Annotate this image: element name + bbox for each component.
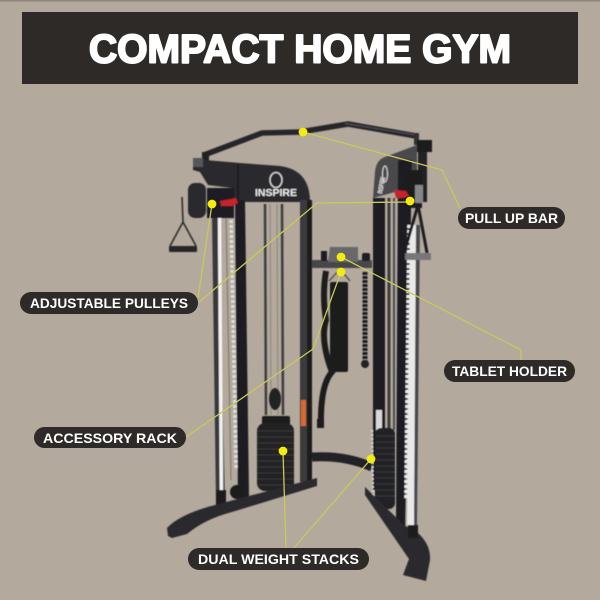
left cables bbox=[265, 204, 283, 415]
left front post and chain bbox=[235, 200, 249, 501]
right weight stack bbox=[375, 428, 395, 509]
title banner: COMPACT HOME GYM bbox=[89, 28, 511, 72]
leader lines bbox=[186, 132, 521, 549]
right frame bbox=[372, 140, 432, 532]
brand logo right: INSPIRE bbox=[377, 176, 388, 194]
label: adjustable pulleys: ADJUSTABLE PULLEYS bbox=[30, 295, 188, 311]
title banner bbox=[22, 12, 578, 84]
label: tablet holder: TABLET HOLDER bbox=[452, 363, 567, 379]
brand logo left bbox=[255, 172, 297, 199]
pull up bar bbox=[202, 124, 419, 162]
left base bbox=[167, 478, 317, 538]
rear arc base bbox=[312, 457, 372, 467]
left frame bbox=[193, 158, 312, 506]
accessory rack and tablet holder bbox=[312, 247, 372, 428]
label: accessory rack bbox=[34, 427, 186, 448]
label: pull up bar bbox=[458, 207, 565, 229]
left pulley and handle bbox=[169, 183, 238, 252]
right base bbox=[365, 487, 430, 581]
illustration: compact home gym machine bbox=[167, 124, 432, 581]
label: accessory rack: ACCESSORY RACK bbox=[43, 430, 177, 446]
left weight stack bbox=[257, 388, 294, 491]
brand logo left: INSPIRE bbox=[255, 188, 297, 199]
label: dual weight stacks bbox=[188, 548, 369, 570]
label: tablet holder bbox=[444, 360, 575, 382]
label: adjustable pulleys bbox=[20, 292, 198, 314]
marker dots bbox=[208, 128, 414, 463]
label: pull up bar: PULL UP BAR bbox=[465, 210, 558, 226]
label: dual weight stacks: DUAL WEIGHT STACKS bbox=[198, 551, 359, 567]
